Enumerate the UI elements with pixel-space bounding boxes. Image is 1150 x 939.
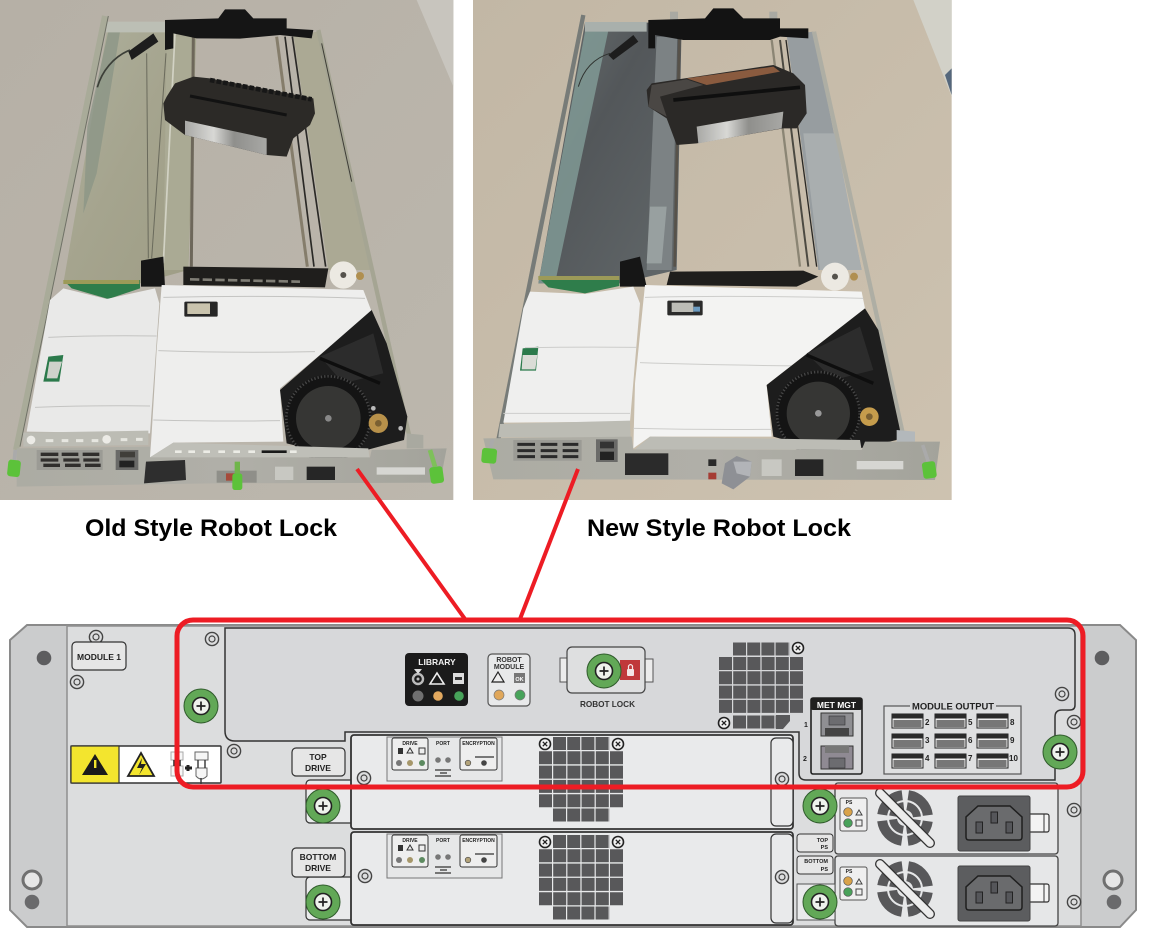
met mgt ports: 1 <box>804 722 808 729</box>
heading: new style robot lock: New Style Robot Lock <box>587 515 852 542</box>
green thumbscrew left <box>184 689 218 723</box>
arrow: new style line <box>520 469 578 619</box>
bottom drive module <box>306 832 793 925</box>
green thumbscrew right <box>1043 735 1077 769</box>
small screws <box>70 632 1081 909</box>
arrow: old style line <box>357 469 465 619</box>
warning label <box>71 746 221 784</box>
met mgt ports: 2 <box>803 756 807 763</box>
module output ports: 7 <box>968 754 973 763</box>
top ps label <box>797 834 833 852</box>
module output ports: 6 <box>968 736 973 745</box>
top drive label <box>292 748 345 776</box>
top ps label: TOP <box>817 838 828 844</box>
status panel: library <box>405 653 468 706</box>
bottom ps label: PS <box>821 867 828 873</box>
bottom power supply <box>797 856 1058 926</box>
met mgt ports: MET MGT <box>817 700 857 710</box>
status panel: robot module: ROBOT <box>496 657 522 664</box>
module output ports <box>884 702 1021 774</box>
top vent grid <box>718 642 804 729</box>
status panel: robot module: OK <box>515 677 524 683</box>
heading: old style robot lock: Old Style Robot Lock <box>85 515 338 542</box>
module output ports: 2 <box>925 718 930 727</box>
top drive label: TOP <box>309 752 327 762</box>
bottom drive label <box>292 848 345 877</box>
photo: new style robot lock tray <box>473 0 952 500</box>
status panel: library: LIBRARY <box>418 657 456 667</box>
bottom drive label: DRIVE <box>305 863 331 873</box>
module output ports: 8 <box>1010 718 1015 727</box>
module output ports: 10 <box>1009 754 1018 763</box>
top drive module <box>306 735 793 829</box>
module output ports: MODULE OUTPUT <box>912 702 995 712</box>
chassis body <box>10 625 1136 927</box>
bottom drive label: BOTTOM <box>300 852 336 862</box>
top ps label: PS <box>821 845 828 851</box>
module output ports: 9 <box>1010 736 1015 745</box>
mounting holes <box>23 651 1122 909</box>
status panel: robot module <box>488 654 530 706</box>
top power supply <box>803 783 1058 854</box>
module 1 label: MODULE 1 <box>77 652 121 662</box>
module 1 label <box>72 630 126 670</box>
callout: red highlight box <box>177 620 1083 787</box>
status panel: robot module: MODULE <box>494 664 524 671</box>
photo: old style robot lock tray <box>0 0 453 500</box>
met mgt ports <box>803 698 862 774</box>
robot module plate <box>225 628 1075 780</box>
top drive label: DRIVE <box>305 763 331 773</box>
module output ports: 3 <box>925 736 930 745</box>
module output ports: 5 <box>968 718 973 727</box>
bottom ps label <box>797 856 833 874</box>
module output ports: 4 <box>925 754 930 763</box>
robot lock: ROBOT LOCK <box>580 700 635 709</box>
robot lock <box>560 647 653 709</box>
diagram: rear panel of module <box>10 625 1136 927</box>
bottom ps label: BOTTOM <box>804 859 828 865</box>
